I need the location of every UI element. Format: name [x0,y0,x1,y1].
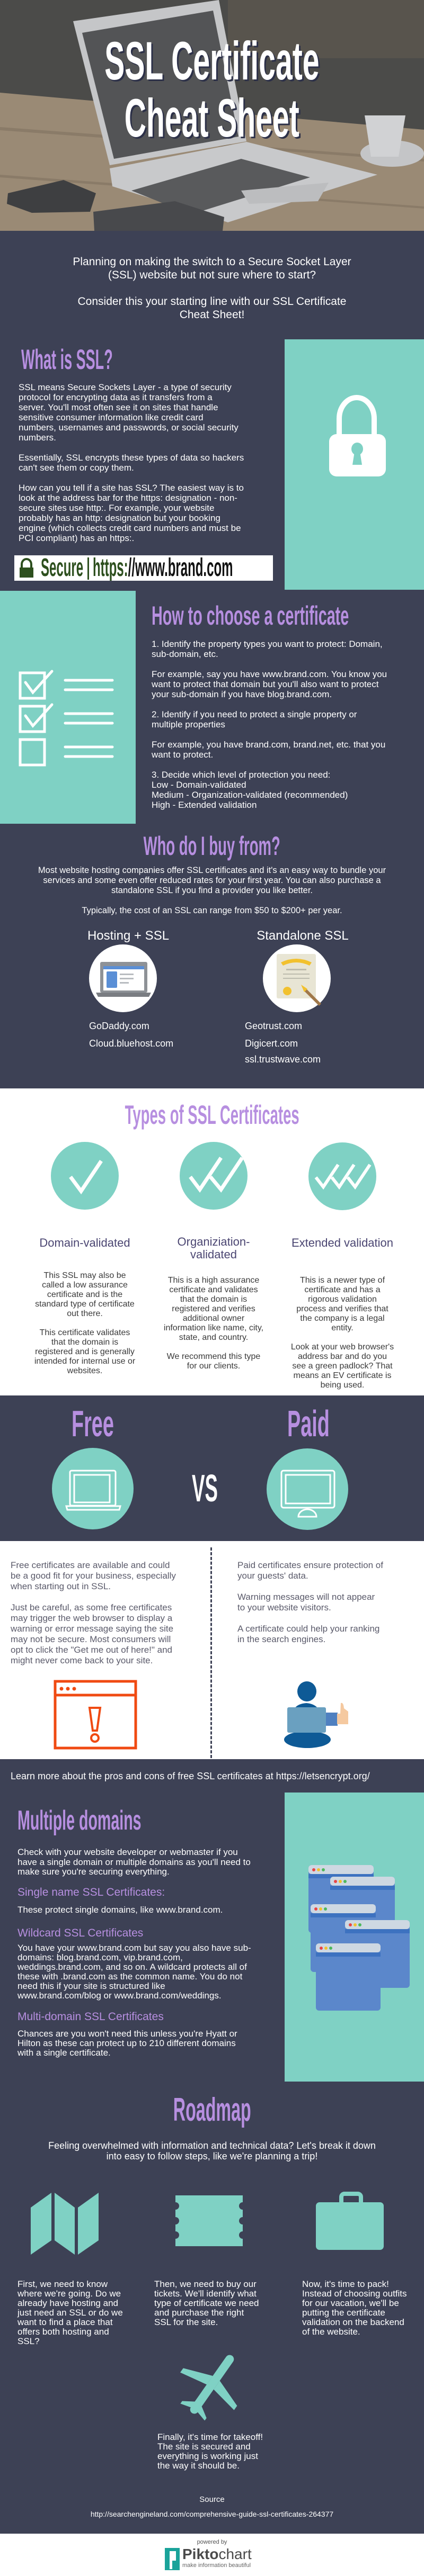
column: extended validation: Extended validation [292,1236,393,1249]
column: domain-validated: called a low assurance [42,1281,128,1290]
intro text [73,256,351,321]
text: source: Source [199,2495,225,2504]
laptop screen [73,0,246,165]
text: how to choose steps: your sub-domain if you have blog.brand.com. [152,689,332,699]
text: who do I buy from: Most website hosting companies offer SSL certificates and it's an easy way to bundle your [38,866,386,875]
icon: map [31,2193,99,2255]
column: extended validation: entity. [331,1323,354,1332]
secure address bar [14,555,273,581]
icon: ticket [175,2195,243,2246]
text: roadmap step 2 [154,2279,259,2327]
text: roadmap step 1: First, we need to know [17,2279,108,2289]
column: extended validation: certificate and has a [304,1285,381,1294]
icon: browser warning [54,1680,137,1749]
text: what is SSL body: engine (which collects credit card numbers and must be [19,523,241,533]
text: how to choose steps: For example, say you have www.brand.com. You know you [152,669,387,679]
text: free details: warning or error message saying the site [11,1624,173,1634]
icon: browser windows [308,1865,410,2011]
text: roadmap step 3 [302,2279,407,2337]
text: roadmap final: everything is working just [157,2451,258,2461]
text: paid details: Warning messages will not appear [237,1592,375,1602]
heading: roadmap: Roadmap [173,2092,251,2128]
text: roadmap step 2: and purchase the right [154,2308,244,2318]
text: roadmap final: Finally, it's time for takeoff! [157,2432,263,2442]
subheading: multi-domain: Multi-domain SSL Certificates [17,2011,164,2023]
column: standalone SSL: Digicert.com [245,1038,298,1049]
column: hosting + SSL: Hosting + SSL [87,929,169,943]
text: multiple domains body: You have your www.brand.com but say you also have sub- [17,1943,251,1953]
column: domain-validated: out there. [67,1309,103,1318]
column: domain-validated: Domain-validated [39,1236,130,1249]
text: multiple domains body: www.brand.com/blog or www.brand.com/weddings. [17,1990,222,2001]
icon: single check [51,1142,119,1210]
column: standalone SSL: ssl.trustwave.com [245,1054,321,1065]
column: organization-validated: registered and verifies [172,1304,255,1313]
column: extended validation [291,1236,394,1390]
text: what is SSL body: PCI compliant) has an https:. [19,533,134,543]
icon: triple check [308,1142,376,1210]
text: how to choose steps: Low - Domain-validated [152,780,246,790]
subheading: single name: Single name SSL Certificates: [17,1886,165,1898]
text: how to choose steps: sub-domain, etc. [152,649,218,659]
panel: multiple domains teal image [285,1793,424,2082]
heading: who do I buy from: Who do I buy from? [144,831,280,861]
column: extended validation: being used. [321,1381,364,1390]
text: how to choose steps [152,639,387,810]
footer: piktochart: make information beautiful [182,2562,251,2569]
text: what is SSL body: can't see them or copy them. [19,463,134,473]
text: roadmap step 1: already have hosting and [17,2298,118,2308]
icon: airplane [180,2355,237,2420]
text: roadmap step 2: SSL for the site. [154,2317,218,2327]
text: roadmap final: The site is secured and [157,2442,251,2452]
text: how to choose steps: For example, you have brand.com, brand.net, etc. that you [152,740,385,750]
subheading: wildcard: Wildcard SSL Certificates [17,1927,143,1939]
column: extended validation: see a green padlock? That [292,1362,393,1371]
icon: laptop circle (free) [52,1448,134,1529]
text: VS: VS [192,1467,218,1510]
column: domain-validated: websites. [67,1366,102,1375]
text: roadmap step 1: just need an SSL or do we [17,2308,123,2318]
icon: monitor circle (paid) [267,1448,348,1530]
text: multiple domains body [17,1847,251,2058]
heading: multiple domains: Multiple domains [17,1805,142,1836]
text: how to choose steps: 3. Decide which level of protection you need: [152,770,330,780]
text: what is SSL body: server. You'll most often see it on sites that handle [19,402,218,412]
icon: double check [180,1142,248,1210]
column: domain-validated: intended for internal use or [34,1357,135,1366]
text: roadmap step 1: offers both hosting and [17,2327,109,2337]
text: how to choose steps: 1. Identify the property types you want to protect: Domain, [152,639,383,649]
text: what is SSL body: Essentially, SSL encrypts these types of data so hackers [19,453,244,463]
heading: free: Free [72,1403,114,1444]
text: multiple domains body: Chances are you won't need this unless you're Hyatt or [17,2029,237,2039]
heading: paid: Paid [287,1403,330,1444]
section: free vs paid details (white) [0,1541,424,1759]
column: domain-validated: registered and is generally [35,1347,135,1356]
column: organization-validated: We recommend this type [167,1352,260,1361]
column: extended validation: rigorous validation [308,1295,377,1304]
column: organization-validated: for our clients. [187,1362,240,1371]
footer: piktochart: Piktochart [182,2546,252,2562]
text: what is SSL body: secure sites use http:. For example, your website [19,503,214,513]
column: extended validation: This is a newer type of [300,1276,385,1285]
text: multiple domains body: domains: blog.brand.com, vip.brand.com, [17,1952,183,1962]
column: extended validation: address bar and do you [298,1352,387,1361]
text: multiple domains body: these with .brand.com as the common name. You do not [17,1971,242,1981]
text: free details: may trigger the web browser to display a [11,1613,172,1623]
text: roadmap final: the way it should be. [157,2461,240,2471]
text: roadmap intro: Feeling overwhelmed with information and technical data? Let's break it down [48,2140,376,2151]
text: roadmap step 3: of the website. [302,2327,360,2337]
hero: photo background [0,0,424,231]
column: hosting + SSL: Cloud.bluehost.com [89,1038,173,1049]
text: roadmap step 2: Then, we need to buy our [154,2279,257,2289]
intro text: Planning on making the switch to a Secure Socket Layer [73,256,351,268]
column: hosting + SSL: GoDaddy.com [89,1021,149,1031]
text: what is SSL body: SSL means Secure Sockets Layer - a type of security [19,382,232,392]
column: domain-validated [34,1236,135,1375]
text: roadmap step 1 [17,2279,123,2346]
text: paid details: A certificate could help your ranking [237,1624,379,1634]
heading: how to choose: How to choose a certificate [152,601,349,631]
text: free details: Free certificates are available and could [11,1560,170,1570]
text: roadmap step 3: putting the certificate [302,2308,385,2318]
panel: what is SSL teal image [285,339,424,590]
column: organization-validated: certificate and validates [169,1285,258,1294]
text: how to choose steps: High - Extended validation [152,800,257,810]
heading: types of SSL: Types of SSL Certificates [125,1100,299,1130]
laptop base [110,142,377,222]
text: how to choose steps: multiple properties [152,719,225,729]
text: roadmap step 3: Now, it's time to pack! [302,2279,389,2289]
text: roadmap intro: into easy to follow steps, like we're planning a trip! [107,2151,317,2161]
intro text: Cheat Sheet! [180,309,244,321]
column: hosting + SSL [87,929,173,1049]
text: what is SSL body: numbers, usernames and passwords, or social security [19,422,238,433]
column: organization-validated [164,1235,263,1371]
heading: what is SSL: What is SSL? [21,344,113,375]
column: organization-validated: validated [190,1248,237,1261]
column: domain-validated: that the domain is [51,1338,118,1347]
text: what is SSL body: sensitive consumer information like credit card [19,412,204,422]
title [104,31,321,150]
text: multiple domains body: weddings.brand.com, and so on. A wildcard protects all of [17,1962,247,1972]
text: roadmap step 2: tickets. We'll identify what [154,2289,257,2299]
column: organization-validated: information like name, city, [164,1323,263,1332]
title: Cheat Sheet [126,89,301,150]
text: how to choose steps: 2. Identify if you need to protect a single property or [152,709,357,719]
footer: piktochart: powered by [197,2539,227,2545]
text: multiple domains body: with a single certificate. [17,2048,111,2058]
icon: laptop in circle [89,944,157,1012]
column: standalone SSL: Geotrust.com [245,1021,302,1031]
text: free details: might never come back to your site. [11,1655,153,1665]
text: paid details: your guests' data. [237,1571,308,1581]
text: what is SSL body: protocol for encrypting data as it transfers from a [19,392,213,402]
text: how to choose steps: Medium - Organization-validated (recommended) [152,790,348,800]
column: extended validation: Look at your web browser's [291,1343,394,1352]
text: what is SSL body: How can you tell if a site has SSL? The easiest way is to [19,483,244,493]
text: roadmap intro [48,2140,376,2161]
text: multiple domains body: need this if your site is structured like [17,1981,165,1991]
phone [7,180,96,213]
text: learn more: Learn more about the pros and cons of free SSL certificates at https://letsencrypt.org/ [11,1771,370,1781]
text: roadmap step 1: where we're going. Do we [17,2289,121,2299]
title: SSL Certificate [104,31,320,91]
icon: padlock [329,395,386,476]
text: who do I buy from: standalone SSL if you find a provider you like better. [111,886,313,895]
text: what is SSL body: numbers. [19,433,56,443]
icon: certificate in circle [263,944,331,1012]
column: domain-validated: This SSL may also be [43,1271,126,1280]
cup [360,140,424,167]
text: what is SSL body: look at the address bar for the https: designation - non- [19,493,237,503]
column: organization-validated: This is a high assurance [168,1276,259,1285]
column: organization-validated: Organiziation- [178,1235,250,1248]
column: standalone SSL: Standalone SSL [257,929,349,943]
text: roadmap step 1: want to find a place that [17,2317,113,2327]
text: who do I buy from: Typically, the cost of an SSL can range from $50 to $200+ per year. [82,906,342,915]
title: SSL Certificate [106,32,321,93]
text: how to choose steps: want to protect. [152,750,213,760]
text: roadmap step 3: Instead of choosing outfits [302,2289,407,2299]
footer: piktochart [0,2534,424,2576]
text: free details: be a good fit for your business, especially [11,1571,176,1581]
icon: piktochart logo [165,2548,180,2570]
text: paid details: in the search engines. [237,1634,325,1644]
panel: checklist teal [0,591,136,824]
intro text: (SSL) website but not sure where to start? [108,269,316,281]
text: roadmap final [157,2432,263,2471]
icon: person with laptop thumbs up [284,1681,348,1748]
text: how to choose steps: want to protect that domain but you'll also want to protect [152,679,378,689]
title: Cheat Sheet [125,88,299,148]
text: what is SSL body: probably has an http: designation but your booking [19,513,220,523]
column: standalone SSL [245,929,349,1065]
text: multiple domains body: Hilton as these can protect up to 210 different domains [17,2038,236,2048]
text: multiple domains body: make sure you're securing everything. [17,1867,170,1877]
text: multiple domains body: Check with your website developer or webmaster if you [17,1847,238,1857]
text: roadmap step 1: SSL? [17,2336,40,2346]
text: roadmap step 3: validation on the backend [302,2317,404,2327]
text: free details: Just be careful, as some free certificates [11,1602,172,1613]
text: paid details [237,1560,383,1644]
text: roadmap step 3: for our vacation, we'll be [302,2298,399,2308]
text: free details: when starting out in SSL. [11,1581,111,1591]
text: who do I buy from [38,866,386,915]
text: http://searchengineland.com/comprehensive-guide-ssl-certificates-264377 [91,2510,333,2518]
column: domain-validated: This certificate validates [40,1328,130,1337]
text: roadmap step 2: type of certificate we need [154,2298,259,2308]
text: multiple domains body: These protect single domains, like www.brand.com. [17,1905,223,1915]
text: free details: opt to click the "Get me out of here!" and [11,1645,172,1655]
column: extended validation: the company is a legal [300,1314,385,1323]
column: extended validation: means an EV certificate is [294,1371,391,1380]
text: multiple domains body: have a single domain or multiple domains as you'll need to [17,1857,251,1867]
section: types of SSL (white) [0,1088,424,1395]
column: organization-validated: that the domain is [180,1295,247,1304]
text: paid details: Paid certificates ensure protection of [237,1560,383,1570]
intro text: Consider this your starting line with our SSL Certificate [78,295,346,308]
text: free details: may not be secure. Most consumers will [11,1634,171,1644]
column: organization-validated: additional owner [183,1314,244,1323]
text: paid details: to your website visitors. [237,1602,331,1613]
column: domain-validated: certificate and is the [47,1290,122,1299]
column: domain-validated: standard type of certificate [35,1300,135,1309]
column: organization-validated: state, and country. [179,1333,248,1342]
icon: checklist [19,670,113,767]
column: extended validation: process and verifies that [296,1304,388,1313]
text: what is SSL body [19,382,244,543]
text: free details [11,1560,176,1665]
notebook [93,201,224,231]
text: who do I buy from: services and some even offer reduced rates for your first year. You can also purchase a [43,876,381,885]
icon: suitcase [316,2192,384,2250]
